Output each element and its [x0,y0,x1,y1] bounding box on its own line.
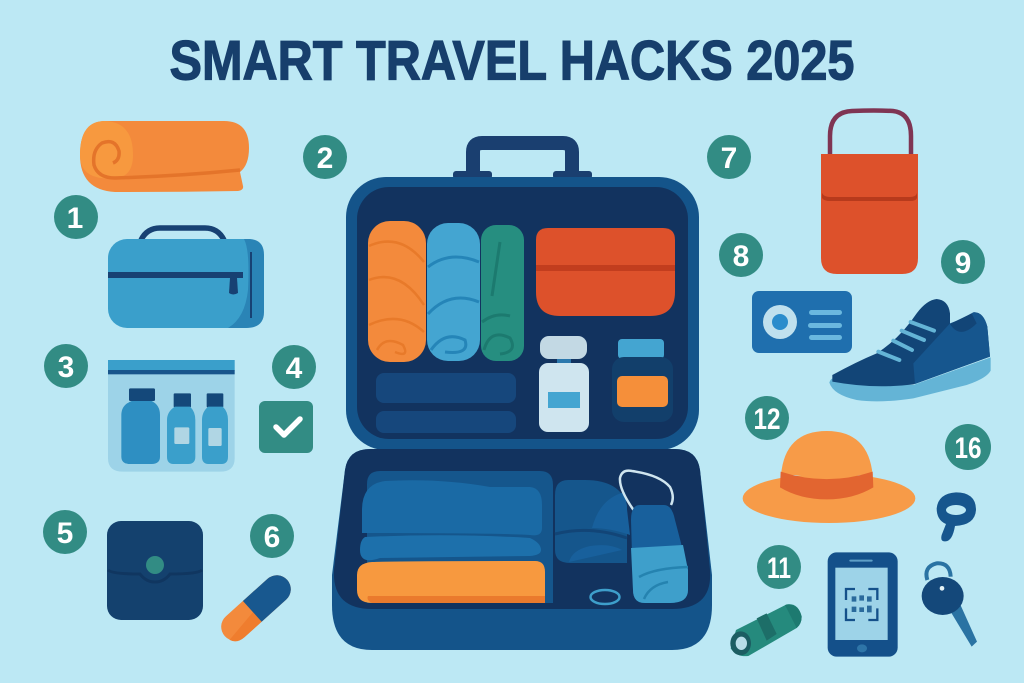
central suitcase [332,143,712,650]
folded blue clothes stack [357,471,553,603]
red packing pouch [536,228,675,316]
badge 12 [745,396,789,440]
rolled orange towel [368,221,426,362]
badge 4: 4 [286,352,303,385]
badge 2 [303,135,347,179]
badge 1 [54,195,98,239]
badge 9 [941,240,985,284]
small ring [590,590,620,604]
badge 16: 16 [954,432,982,465]
badge 3: 3 [58,351,74,384]
checkbox icon [259,401,313,453]
badge 2: 2 [317,142,333,175]
jar with orange label [612,339,673,422]
sneaker [829,299,991,401]
left item: rolled towel [80,121,249,192]
small water bottle with cord [620,471,688,603]
badge 4 [272,345,316,389]
left item: navy pouch [107,521,203,620]
badge 8: 8 [733,240,749,273]
left item: clear toiletries bag [108,360,235,472]
white bottle [539,336,589,432]
suitcase handle [453,143,592,179]
badge 1: 1 [67,202,83,235]
badge 7 [707,135,751,179]
badge 9: 9 [955,247,971,280]
badge 6: 6 [264,521,280,554]
rolled navy socks [555,480,630,563]
suitcase lower shell [332,449,712,650]
capsule icon [215,569,297,647]
car key [922,563,977,647]
badge 5: 5 [57,517,73,550]
flashlight [730,604,802,656]
title: SMART TRAVEL HACKS 2025 [170,28,854,92]
key ring icon [937,492,976,541]
flat navy packing cube [376,373,516,433]
smartphone with QR code [828,552,898,657]
badge 3 [44,344,88,388]
rolled green towel [481,225,524,361]
badge 11: 11 [767,552,791,585]
orange folded towel [357,561,545,603]
rolled blue towel [427,223,480,361]
badge 16 [945,424,991,470]
badge 8 [719,233,763,277]
badge 11 [757,545,801,589]
ID card [752,291,852,353]
badge 7: 7 [721,142,737,175]
right item: red tote pouch [821,110,918,274]
sun hat [743,431,915,523]
badge 5 [43,510,87,554]
badge 6 [250,514,294,558]
suitcase upper lid [346,177,699,450]
badge 12: 12 [754,403,780,436]
left item: toiletry bag [108,228,264,328]
